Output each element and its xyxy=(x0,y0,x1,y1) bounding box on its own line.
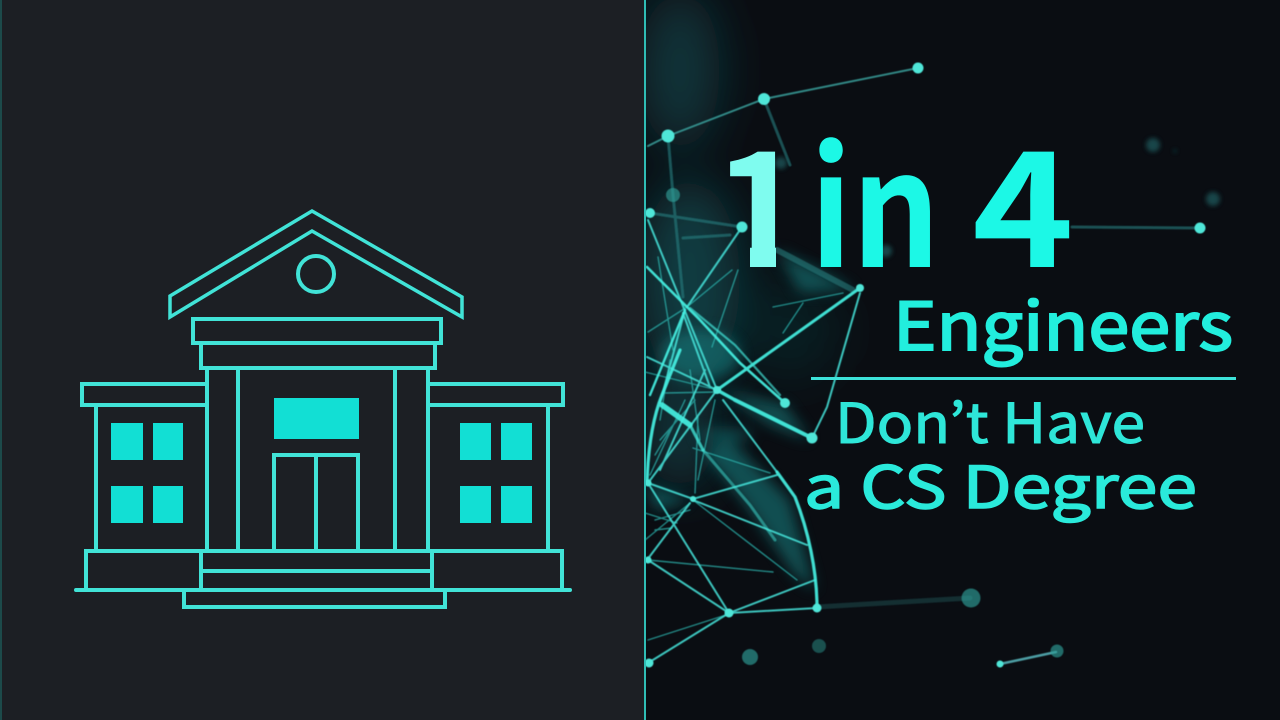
text: Don't Have: Don’t Have xyxy=(835,379,1145,459)
left windows xyxy=(111,423,183,523)
divider: vertical panel edge xyxy=(644,0,646,720)
network graphic xyxy=(640,0,1220,668)
central columns xyxy=(207,368,428,550)
door xyxy=(274,455,358,550)
roof circle xyxy=(298,256,334,292)
headline: 1 in 4: 4 xyxy=(972,82,1074,314)
entablature xyxy=(201,343,435,368)
headline: 1 in 4 xyxy=(730,104,1070,267)
icon: university building xyxy=(76,211,570,607)
divider: left edge line xyxy=(0,0,2,720)
ground line xyxy=(76,588,570,592)
panel: right network background xyxy=(644,0,1280,720)
right windows xyxy=(460,423,532,523)
sign xyxy=(274,398,359,439)
left wing xyxy=(82,384,206,550)
base and steps xyxy=(86,551,562,590)
cornice xyxy=(193,319,441,343)
bottom step xyxy=(184,590,445,607)
roof xyxy=(170,211,462,317)
panel: left building background xyxy=(0,0,644,720)
divider rule xyxy=(811,377,1236,380)
text: a CS Degree: a CS Degree xyxy=(804,441,1197,525)
headline: 1 in 4: 1 xyxy=(713,82,807,314)
headline: 1 in 4: in xyxy=(810,82,940,314)
right wing xyxy=(428,384,563,550)
subheading: Engineers: Engineers xyxy=(893,274,1233,370)
